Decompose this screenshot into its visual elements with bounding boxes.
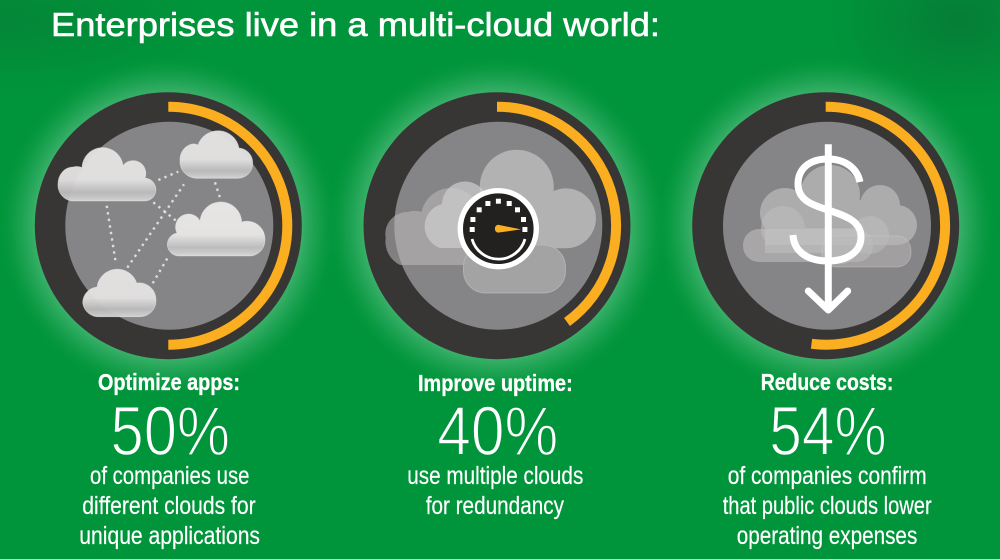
- text block: optimize apps: of companies use: [90, 462, 250, 490]
- icon: cloud right: [167, 202, 265, 256]
- text block: optimize apps: 50%: [110, 392, 230, 470]
- text block: improve uptime: 40%: [437, 392, 558, 470]
- text block: improve uptime: for redundancy: [426, 492, 564, 520]
- text block: reduce costs: 54%: [769, 392, 887, 470]
- panel: optimize apps: [35, 92, 302, 359]
- panel: improve uptime: [364, 92, 630, 359]
- icon: clouds: [743, 165, 917, 267]
- text block: reduce costs: [723, 369, 932, 550]
- icon: dollar with down arrow: [793, 144, 861, 310]
- icon: clouds: [385, 150, 596, 293]
- text block: reduce costs: that public clouds lower: [723, 492, 932, 520]
- ring with grey disc: [692, 92, 959, 359]
- dotted connections: [107, 172, 220, 283]
- text block: reduce costs: of companies confirm: [728, 462, 927, 490]
- title: Enterprises live in a multi-cloud world:: [51, 6, 660, 43]
- text block: reduce costs: operating expenses: [737, 522, 917, 550]
- text block: improve uptime: Improve uptime:: [418, 370, 573, 396]
- icon: cloud bottom: [83, 269, 156, 317]
- text block: improve uptime: [407, 370, 583, 520]
- icon: gauge: [460, 191, 536, 267]
- progress arc 50%: [168, 107, 287, 345]
- panel: reduce costs: [692, 92, 959, 359]
- progress arc 54%: [812, 107, 945, 345]
- text block: optimize apps: Optimize apps:: [98, 369, 240, 395]
- progress arc 40%: [497, 107, 616, 322]
- ring with grey disc: [35, 92, 302, 359]
- icon: cloud top right: [180, 131, 253, 178]
- text block: optimize apps: different clouds for: [82, 492, 256, 520]
- icon: cloud top left: [58, 148, 156, 201]
- text block: optimize apps: unique applications: [79, 522, 260, 550]
- text block: optimize apps: [79, 369, 260, 550]
- text block: reduce costs: Reduce costs:: [761, 369, 893, 395]
- text block: improve uptime: use multiple clouds: [407, 462, 583, 490]
- ring with grey disc: [364, 92, 630, 359]
